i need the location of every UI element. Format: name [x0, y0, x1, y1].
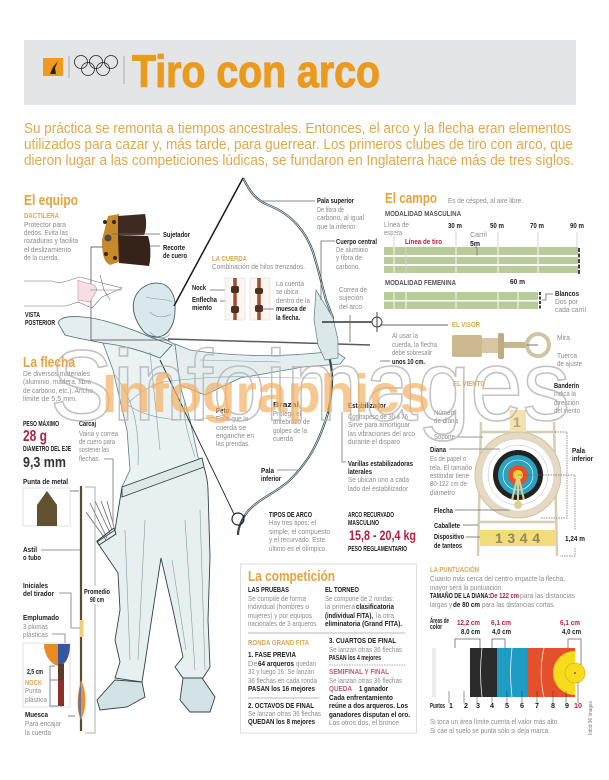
points row — [430, 682, 582, 710]
recurve bow weight: PESO REGLAMENTARIO — [348, 544, 407, 553]
stabilizer label: Sirve para amortiguar — [348, 420, 410, 429]
arm guard label: cuerda — [273, 434, 294, 443]
ronda grand fita: 32 y luego 16. Se lanzan — [248, 667, 314, 676]
initials label — [23, 581, 80, 628]
upper limb label: Pala superior — [317, 196, 354, 205]
panel: el visor: cuerda, la flecha — [392, 340, 438, 349]
bow — [160, 178, 448, 535]
arrow description: (aluminio, madera, fibra — [23, 377, 92, 386]
rear view label: VISTA — [25, 310, 40, 319]
nock slot label: la cuerda — [25, 728, 52, 737]
dactilera text: el deslizamiento — [24, 245, 71, 254]
dactilera text: dedos. Evita las — [24, 228, 68, 237]
text — [430, 565, 575, 609]
ronda grand fita: quedan — [296, 659, 316, 668]
fletching: 3 plumas — [23, 622, 48, 631]
ring width labels: 6,1 cm — [560, 618, 580, 627]
scoreboard: 1344 — [495, 530, 540, 546]
stabilizer rods label: lado del estabilizador — [348, 484, 408, 493]
target rings — [482, 439, 554, 511]
panel: la cuerda: dentro de la — [276, 296, 311, 305]
ronda grand fita — [248, 640, 321, 726]
target labels: Caballete — [434, 521, 460, 530]
arrow description: de carbono, etc.). Ancho — [23, 386, 93, 395]
target labels: Pala — [572, 446, 586, 455]
head — [133, 283, 175, 337]
left shoe — [97, 680, 145, 710]
cuartos y final: PASAN los 4 mejores — [329, 653, 381, 662]
notes: Si toca un área límite cuenta el valor más alto. — [430, 717, 559, 726]
shaft label — [23, 545, 80, 562]
central body label: Cuerpo central — [336, 237, 377, 246]
archer figure — [58, 283, 345, 712]
points row: 5 — [505, 701, 509, 710]
text: TAMAÑO DE LA DIANA: — [430, 591, 490, 600]
intro text: Su práctica se remonta a tiempos ancestrales. Entonces, el arco y la flecha eran elementos — [24, 121, 571, 137]
cuartos y final — [329, 636, 410, 727]
arrow description — [23, 369, 93, 403]
target labels: Banderín — [554, 381, 579, 390]
panel: la cuerda: Combinación de hilos trenzados. — [212, 262, 305, 271]
cuartos y final: Se lanzan otras 36 flechas — [329, 645, 402, 654]
bow limbs — [238, 178, 333, 535]
bow types: Hay tres tipos: el — [269, 518, 316, 527]
target labels: 80-122 cm de — [430, 479, 467, 488]
panel: la puntuación — [430, 565, 594, 735]
ronda grand fita: 2. OCTAVOS DE FINAL — [248, 701, 315, 710]
dactilera text: DACTILERA — [24, 213, 59, 220]
fletching: 2,5 cm — [27, 667, 43, 676]
lower limb label: inferior — [261, 474, 281, 483]
cuartos y final: reúne a dos arqueros. Los — [329, 701, 408, 710]
fletching: Punta — [25, 686, 42, 695]
stabilizer label: las vibraciones del arco — [348, 429, 415, 438]
sight icon — [372, 312, 382, 332]
header band — [24, 40, 576, 105]
arrow specs: 28 g — [23, 428, 47, 445]
text: De 122 cm — [490, 593, 519, 600]
ronda grand fita: 1. FASE PREVIA — [248, 650, 296, 659]
rear view label — [25, 310, 56, 327]
target labels: indica la — [554, 389, 577, 398]
panel: la cuerda: Enflecha — [192, 295, 218, 304]
bow types: simple, el compuesto — [269, 527, 330, 536]
chest guard label: las prendas. — [216, 439, 250, 448]
bow types — [269, 510, 330, 553]
bow types: último es el olímpico. — [269, 544, 327, 553]
bow part labels — [216, 196, 416, 553]
panel: el visor: Tuerca — [557, 351, 578, 360]
points row: 2 — [464, 701, 468, 710]
men's field — [384, 211, 584, 275]
initials label: del tirador — [23, 589, 54, 598]
drawing arm — [58, 317, 172, 358]
target labels: diámetro — [430, 488, 455, 497]
shirt folds — [115, 297, 317, 465]
cuartos y final: 3. CUARTOS DE FINAL — [329, 636, 397, 645]
finger tab labels: Sujetador — [163, 230, 190, 239]
target labels: Soporte — [434, 432, 455, 441]
ronda grand fita: QUEDAN los 8 mejores — [248, 717, 315, 726]
arrow length: Promedio — [84, 587, 110, 596]
las pruebas: Se compite de forma — [248, 594, 307, 603]
recurve bow weight: ARCO RECURVADO — [348, 510, 394, 519]
arrow description: De diversos materiales — [23, 369, 90, 378]
field note: Es de césped, al aire libre. — [448, 196, 523, 205]
notes: Si cae al suelo se punta sólo si deja marca. — [430, 726, 550, 735]
lower limb label — [261, 466, 300, 483]
central body label: De aluminio — [336, 245, 368, 254]
arm guard label — [273, 400, 310, 443]
target labels — [430, 381, 593, 556]
points row: 1 — [449, 701, 453, 710]
nock slot label — [25, 710, 75, 737]
stabilizer rods label: Se ubican uno a cada — [348, 475, 410, 484]
central body label — [321, 237, 377, 300]
target labels: del viento — [554, 406, 580, 415]
nock slot label: Para encajar — [25, 719, 61, 728]
el torneo — [325, 585, 402, 628]
cuartos y final: Se lanzan otras 36 flechas — [329, 676, 402, 685]
target ring frame — [475, 432, 561, 518]
section: la flecha — [23, 354, 119, 737]
points row: 10 — [574, 701, 582, 710]
quiver label: sostener las — [79, 445, 109, 454]
target labels: Flecha — [434, 506, 454, 515]
ring width labels: 4,0 cm — [492, 627, 511, 636]
women's field: cada carril — [555, 305, 586, 314]
women's field: 60 m — [510, 277, 525, 286]
target labels: Número — [434, 408, 456, 417]
women's field: MODALIDAD FEMENINA — [385, 280, 456, 287]
section: el campo — [384, 190, 586, 314]
points row: Puntos — [430, 701, 445, 710]
chest guard label: cuerda se — [216, 423, 246, 432]
panel: el visor: de ajuste — [557, 359, 582, 368]
heading: El campo — [385, 190, 437, 207]
string — [174, 178, 243, 306]
belt — [122, 458, 204, 497]
women's field: Blancos — [555, 289, 579, 298]
text: para las distancias cortas. — [482, 600, 555, 609]
ronda grand fita: De — [248, 659, 257, 668]
panel: la cuerda: La cuerda — [276, 279, 305, 288]
cuartos y final: 1 ganador — [359, 684, 388, 693]
intro text: utilizados para cazar y, más tarde, para guerrear. Los primeros clubes de tiro con arco, que — [24, 137, 573, 153]
ring width labels: 12,2 cm — [457, 618, 480, 627]
metal tip — [23, 477, 79, 526]
heading: El equipo — [24, 192, 78, 209]
intro text — [24, 121, 574, 169]
stabilizer label: Estabilizador — [348, 401, 386, 410]
intro text: dieron lugar a las competiciones lúdicas, se fundaron en Inglaterra hace más de tres siglos. — [24, 153, 574, 169]
grip — [314, 290, 338, 360]
rear view label: POSTERIOR — [25, 318, 56, 327]
arrow specs: 9,3 mm — [23, 454, 66, 471]
shaft label: Astil — [23, 545, 37, 554]
panel: la cuerda: se ubica — [276, 287, 299, 296]
panel: la cuerda: LA CUERDA — [212, 256, 247, 263]
stabilizer rods label: laterales — [348, 467, 372, 476]
bow arm — [175, 344, 345, 395]
notes — [430, 717, 559, 735]
target labels: 1,24 m — [565, 534, 585, 543]
target on stand — [430, 381, 593, 556]
el torneo: la otra — [376, 611, 395, 620]
points row: 4 — [490, 701, 494, 710]
quiver label: Vaina y correa — [79, 429, 119, 438]
finger tab labels: Recorte — [163, 243, 185, 252]
strap label: del arco — [339, 302, 362, 311]
target labels: estándar tiene — [430, 471, 469, 480]
panel: la cuerda: la flecha. — [276, 313, 300, 322]
sight bar — [322, 321, 372, 323]
fletching: NOCK — [25, 680, 42, 687]
men's field: 5m — [470, 239, 480, 248]
el torneo: EL TORNEO — [325, 585, 359, 594]
las pruebas: nacionales de 3 arqueros. — [248, 619, 318, 628]
icon: sport pictogram — [43, 58, 63, 76]
trousers — [97, 464, 210, 682]
panel: la cuerda: muesca de — [276, 304, 306, 313]
quiver label: de cuero para — [79, 437, 116, 446]
central body label: carbono. — [336, 262, 360, 271]
text: largas y — [430, 600, 452, 609]
score strip — [432, 648, 585, 697]
finger tab labels — [112, 230, 190, 260]
cuartos y final: SEMIFINAL Y FINAL — [329, 669, 390, 676]
arrows in target — [512, 475, 524, 505]
stabilizer rods label: Varillas estabilizadoras — [348, 459, 413, 468]
lower limb label: Pala — [261, 466, 275, 475]
ring width labels: 8,0 cm — [461, 627, 480, 636]
points row: 7 — [535, 701, 539, 710]
panel: el visor: unos 10 cm. — [392, 357, 425, 366]
ring width labels: color — [430, 622, 442, 631]
ring width labels: Áreas de — [430, 616, 449, 625]
heading: La flecha — [23, 354, 76, 371]
right shoe — [180, 678, 215, 712]
points row: 6 — [520, 701, 524, 710]
las pruebas: mujeres) y por equipos — [248, 611, 312, 620]
text: Cuanto más cerca del centro impacte la flecha, — [430, 574, 565, 583]
panel: el visor — [380, 322, 582, 368]
el torneo: (individual FITA), — [325, 611, 373, 620]
bow types: y el recurvado. Este — [269, 535, 325, 544]
panel: la cuerda — [192, 256, 311, 322]
men's field: 90 m — [570, 221, 584, 230]
panel: la cuerda: miento — [192, 303, 213, 312]
ronda grand fita: PASAN los 16 mejores — [248, 684, 315, 693]
upper limb label: que la inferior. — [317, 222, 357, 231]
arm guard label: golpes de la — [273, 426, 308, 435]
points row: 3 — [476, 701, 480, 710]
finger tab labels: de cuero — [163, 251, 187, 260]
quiver label: Carcaj — [79, 419, 96, 428]
target labels: de tanteos — [434, 541, 462, 550]
arrow specs — [23, 419, 71, 471]
arm guard label: Protege el — [273, 409, 301, 418]
sight image — [452, 333, 549, 359]
stand — [478, 422, 557, 556]
panel: la competición — [240, 564, 416, 733]
arrow — [168, 339, 370, 345]
torso — [103, 337, 240, 487]
panel: el visor: EL VISOR — [452, 322, 480, 329]
strap label — [339, 285, 367, 342]
men's field: Línea de tiro — [405, 239, 442, 246]
stabilizer label: durante el disparo — [348, 437, 400, 446]
heading: La competición — [248, 568, 335, 585]
dactilera text: Protector para — [24, 220, 67, 229]
ronda grand fita: 64 arqueros — [258, 659, 294, 668]
chest guard label: Peto — [216, 406, 230, 415]
quiver — [86, 501, 116, 545]
target labels: Diana — [430, 445, 447, 454]
target number — [510, 410, 526, 432]
target labels: dirección — [554, 398, 579, 407]
recurve bow weight — [348, 510, 416, 553]
target labels: Es de papel o — [430, 454, 466, 463]
upper limb label: De fibra de — [317, 205, 344, 214]
arrow length: 90 cm — [90, 595, 104, 604]
target labels: EL VIENTO — [453, 381, 485, 388]
men's field: 30 m — [448, 221, 462, 230]
women's field: Dos por — [555, 297, 578, 306]
ronda grand fita: 36 flechas en cada ronda — [248, 676, 318, 685]
text: mayor será la puntuación. — [430, 583, 503, 592]
arm guard label: antebrazo de — [273, 417, 310, 426]
men's field: 50 m — [490, 221, 504, 230]
fletching — [23, 613, 70, 707]
credit: Infod 96 Images — [588, 701, 594, 735]
stabilizer label — [348, 401, 415, 446]
watermark outline text: Sinfoimages — [50, 330, 570, 442]
watermark orange text: Infographics — [102, 364, 430, 424]
panel: el visor: Mira — [557, 333, 571, 342]
arrow shaft — [78, 486, 95, 733]
men's field: Línea de — [384, 220, 409, 229]
fletching: Emplumado — [23, 613, 60, 622]
upper limb label — [262, 196, 364, 231]
las pruebas: LAS PRUEBAS — [248, 585, 289, 594]
dactilera text: rozaduras y facilita — [24, 236, 79, 245]
title: Tiro con arco — [132, 46, 380, 97]
strap label: sujeción — [339, 293, 363, 302]
scoreboard — [480, 530, 556, 546]
quiver label — [79, 419, 119, 525]
chest guard label: Evita que la — [216, 414, 249, 423]
arrow length — [83, 586, 111, 604]
el torneo: Se compone de 2 rondas: — [325, 594, 394, 603]
finger tab image — [102, 214, 150, 266]
section: el equipo — [24, 192, 190, 340]
fletching: plásticas — [23, 630, 48, 639]
initials label: Iniciales — [23, 581, 48, 590]
el torneo: la primera — [325, 602, 356, 611]
las pruebas: individual (hombres o — [248, 602, 309, 611]
arrow specs: PESO MÁXIMO — [23, 419, 59, 428]
central body label: y fibra de — [336, 253, 362, 262]
nock slot label: Muesca — [25, 710, 49, 719]
men's field: 70 m — [530, 221, 544, 230]
arrow description: limite de 5,5 mm. — [23, 394, 77, 403]
panel: el visor: Al usar la — [392, 331, 419, 340]
ronda grand fita: Se lanzan otras 36 flechas — [248, 709, 321, 718]
target labels: de diana — [434, 416, 459, 425]
metal tip: Punta de metal — [23, 477, 68, 486]
strap label: Correa de — [339, 285, 367, 294]
quiver label: flechas. — [79, 454, 100, 463]
hand rear view sketch — [24, 275, 122, 308]
cuartos y final: Cada enfrentamiento — [329, 693, 394, 702]
dactilera text — [24, 213, 79, 262]
el torneo: clasificatoria — [356, 602, 395, 611]
ronda grand fita: RONDA GRAND FITA — [248, 640, 309, 647]
cuartos y final: ganadores disputan el oro. — [329, 710, 410, 719]
target labels: inferior — [572, 454, 593, 463]
stabilizer rods label — [342, 412, 413, 493]
men's field: MODALIDAD MASCULINA — [385, 211, 461, 218]
points row: 8 — [551, 701, 555, 710]
las pruebas — [248, 585, 318, 628]
target labels: Dispositivo — [434, 532, 464, 541]
recurve bow weight: 15,8 - 20,4 kg — [349, 527, 416, 543]
el torneo: eliminatoria (Grand FITA). — [325, 619, 402, 628]
recurve bow weight: MASCULINO — [348, 518, 379, 527]
men's field: Carril — [470, 230, 487, 239]
stabilizer label: Contrapeso de 30 a 76 — [348, 412, 408, 421]
men's field: espera — [384, 228, 403, 237]
text: LA PUNTUACIÓN — [430, 565, 479, 574]
arrow specs: DIÁMETRO DEL EJE — [23, 444, 71, 453]
chest guard label — [216, 406, 254, 448]
arm guard label: Brazal — [273, 400, 299, 409]
ring width labels: 6,1 cm — [491, 618, 511, 627]
target labels: tela. El tamaño — [430, 463, 472, 472]
women's field — [384, 277, 586, 314]
ring width labels: 4,0 cm — [562, 627, 581, 636]
target number: 1 — [513, 414, 521, 430]
panel: la cuerda: Nock — [192, 283, 206, 292]
chest guard label: enganche en — [216, 431, 254, 440]
bow types: TIPOS DE ARCO — [269, 510, 312, 519]
cuartos y final: Los otros dos, el bronce — [329, 718, 399, 727]
text: de 80 cm — [453, 600, 480, 609]
dactilera text: de la cuerda. — [24, 253, 59, 262]
panel: el visor: debe sobresalir — [392, 348, 432, 357]
ring width labels — [430, 616, 581, 665]
icon: olympic rings — [74, 56, 118, 76]
points row: 9 — [565, 701, 569, 710]
cuartos y final: QUEDA — [329, 686, 352, 693]
shaft label: o tubo — [23, 553, 41, 562]
text: para las distancias — [520, 591, 575, 600]
fletching: plástica — [25, 695, 48, 704]
upper limb label: carbono, al igual — [317, 213, 364, 222]
